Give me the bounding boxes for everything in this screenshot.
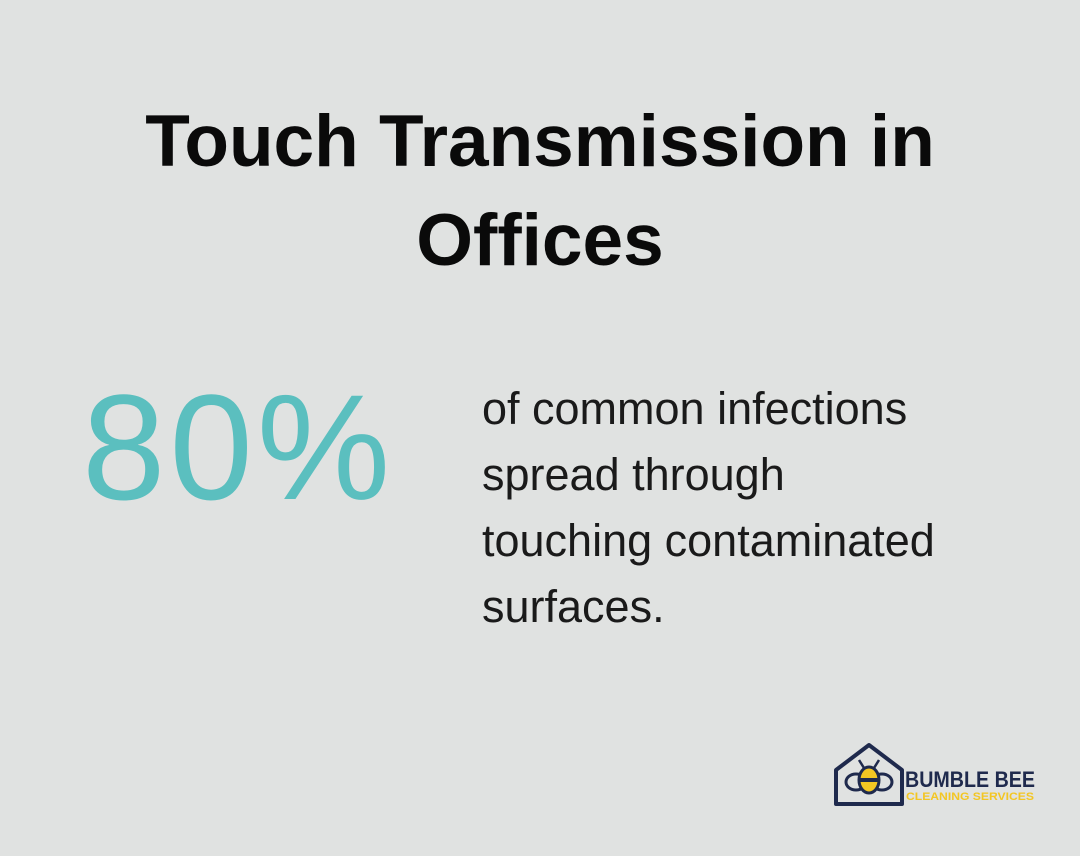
stat description: of common infections [482,383,907,434]
logo [834,743,1035,806]
stat description: surfaces. [482,581,665,632]
title: Offices [416,200,664,281]
stat number: 80% [82,363,394,531]
stat description: touching contaminated [482,515,935,566]
logo text: CLEANING SERVICES [906,791,1034,803]
icon: house with bee [836,745,902,804]
stat description: spread through [482,449,785,500]
title [145,101,935,281]
title: Touch Transmission in [145,101,935,182]
logo text [905,767,1035,803]
stat description [482,383,935,632]
